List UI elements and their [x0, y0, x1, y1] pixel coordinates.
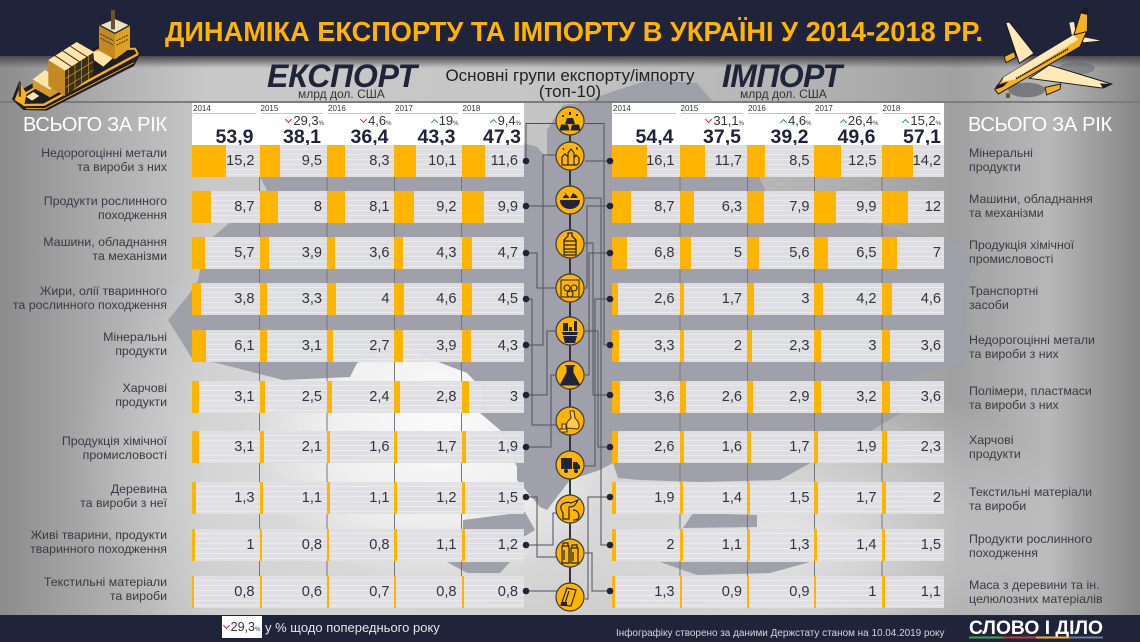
- export data rows: 1,9: [498, 439, 518, 455]
- import row labels: Полімери, пластмаси: [969, 384, 1092, 398]
- import data rows: 1,9: [654, 490, 674, 506]
- export data rows: 4,6: [436, 291, 456, 307]
- import data rows: 6,5: [856, 245, 876, 261]
- export data rows: 1,6: [369, 439, 390, 455]
- export data rows: 4,7: [498, 245, 518, 261]
- import data rows: 7,9: [789, 199, 810, 215]
- import data rows: 1,1: [921, 584, 941, 600]
- import data rows: 9,9: [856, 199, 876, 215]
- import row labels: Текстильні матеріали: [969, 485, 1092, 499]
- export data rows: 1: [246, 537, 254, 553]
- import data rows: 2,6: [654, 439, 674, 455]
- import row labels: Маса з деревини та ін.: [969, 578, 1100, 592]
- heading: center subtitle: Основні групи експорту/імпорту: [445, 66, 695, 85]
- import data rows: 2: [734, 338, 742, 354]
- export data rows: 2,8: [436, 389, 456, 405]
- export totals header: [192, 103, 524, 145]
- export totals header: 29,3%: [293, 113, 324, 128]
- import data rows: 3: [801, 291, 810, 307]
- export data rows: 2,1: [302, 439, 322, 455]
- import totals header: 49,6: [838, 126, 876, 148]
- import data rows: 3: [868, 338, 876, 354]
- import data rows: 1,7: [789, 439, 810, 455]
- export row labels: продукти: [115, 344, 167, 358]
- heading: import: ІМПОРТ: [722, 58, 842, 94]
- export row labels: промисловості: [83, 448, 167, 462]
- import data rows: 3,6: [921, 389, 941, 405]
- import data rows: 5,6: [789, 245, 810, 261]
- import data rows: 1,7: [722, 291, 742, 307]
- import totals header: 2015: [680, 104, 698, 113]
- export totals header: 19%: [439, 113, 458, 128]
- import row labels: промисловості: [969, 252, 1053, 266]
- import data rows: 12: [925, 199, 941, 215]
- export data rows: 0,8: [498, 584, 518, 600]
- export data rows: 8,3: [369, 153, 390, 169]
- export row labels: Мінеральні: [103, 330, 167, 344]
- export data rows: 4,5: [498, 291, 518, 307]
- import totals header: 54,4: [636, 126, 674, 148]
- import totals header: 2014: [613, 104, 631, 113]
- export data rows: 1,1: [369, 490, 390, 506]
- import totals header: 2017: [815, 104, 833, 113]
- legend sample: 29,3%: [231, 620, 260, 634]
- import totals header: 39,2: [771, 126, 808, 148]
- export data rows: 3,9: [302, 245, 322, 261]
- title: ДИНАМІКА ЕКСПОРТУ ТА ІМПОРТУ В УКРАЇНІ У 2014-2018 РР.: [165, 16, 983, 47]
- import data rows: 2,9: [789, 389, 810, 405]
- export data rows: 0,8: [302, 537, 322, 553]
- export totals header: 43,3: [418, 126, 456, 148]
- icon: machinery: [556, 274, 584, 302]
- import data rows: 16,1: [646, 153, 674, 169]
- import data rows: 6,3: [722, 199, 742, 215]
- import data rows: 3,2: [856, 389, 876, 405]
- export data rows: 9,9: [498, 199, 518, 215]
- export data rows: 8,7: [234, 199, 254, 215]
- import data rows: 1,4: [856, 537, 876, 553]
- export data rows: 5,7: [234, 245, 254, 261]
- export row labels: [13, 146, 167, 603]
- export totals header: 53,9: [216, 126, 254, 148]
- export data rows: 1,2: [498, 537, 518, 553]
- import data rows: 1,5: [921, 537, 941, 553]
- export row labels: та вироби: [110, 589, 167, 603]
- import data rows: 11,7: [715, 153, 742, 169]
- icon: gold bars: [556, 107, 584, 135]
- import data rows: 2,3: [789, 338, 810, 354]
- export row labels: продукти: [115, 395, 167, 409]
- data source: Інфографіку створено за даними Держстату станом на 10.04.2019 року: [616, 628, 944, 639]
- export data rows: 2,5: [302, 389, 322, 405]
- import data rows: 5: [734, 245, 742, 261]
- export data rows: 0,8: [234, 584, 254, 600]
- import data rows: 3,6: [654, 389, 674, 405]
- export totals header: 2015: [260, 104, 278, 113]
- export row labels: тваринного походження: [30, 542, 167, 556]
- icon: live animals: [556, 495, 584, 523]
- import totals header: 37,5: [703, 126, 741, 148]
- icon: minerals: [556, 142, 584, 170]
- icon: plant products bowl: [556, 186, 584, 214]
- import totals header: [612, 103, 944, 145]
- export data rows: 9,2: [436, 199, 456, 215]
- icon: plastic bottle: [556, 230, 584, 258]
- export row labels: Харчові: [123, 381, 167, 395]
- export data rows: [192, 145, 524, 608]
- total label right: ВСЬОГО ЗА РІК: [968, 114, 1112, 136]
- icon: truck: [556, 451, 584, 479]
- export data rows: 3,1: [302, 338, 322, 354]
- import data rows: 3,6: [921, 338, 941, 354]
- icon: airplane: [994, 8, 1113, 98]
- legend text: у % щодо попереднього року: [265, 620, 440, 635]
- import data rows: 2,6: [722, 389, 742, 405]
- export data rows: 1,1: [302, 490, 322, 506]
- export row labels: Продукція хімічної: [62, 434, 167, 448]
- import data rows: 1,4: [722, 490, 742, 506]
- import totals header: 2016: [748, 104, 766, 113]
- import row labels: продукти: [969, 447, 1021, 461]
- export data rows: 3,6: [369, 245, 390, 261]
- import data rows: 7: [933, 245, 941, 261]
- import data rows: 1,5: [789, 490, 810, 506]
- export row labels: та вироби з неї: [80, 496, 167, 510]
- export totals header: 47,3: [483, 126, 521, 148]
- export row labels: Жири, олії тваринного: [40, 284, 167, 298]
- export data rows: 8,1: [369, 199, 390, 215]
- import row labels: Машини, обладнання: [969, 192, 1093, 206]
- import data rows: 2,3: [921, 439, 941, 455]
- export row labels: Продукти рослинного: [44, 194, 167, 208]
- export row labels: та вироби з них: [77, 160, 167, 174]
- export data rows: 8: [314, 199, 322, 215]
- icon: textile roll: [556, 583, 584, 611]
- import totals header: 15,2%: [910, 113, 941, 128]
- import row labels: та механізми: [969, 206, 1044, 220]
- export data rows: 3,1: [234, 389, 254, 405]
- export totals header: 2017: [395, 104, 413, 113]
- import data rows: [612, 145, 944, 608]
- export data rows: 0,8: [369, 537, 390, 553]
- export row labels: Живі тварини, продукти: [31, 528, 167, 542]
- export data rows: 1,1: [436, 537, 456, 553]
- import row labels: Недорогоцінні метали: [969, 333, 1095, 347]
- export row labels: походження: [98, 208, 167, 222]
- export row labels: та механізми: [92, 249, 167, 263]
- export data rows: 3,1: [234, 439, 254, 455]
- legend sample: [222, 616, 262, 638]
- export row labels: та рослинного походження: [13, 298, 167, 312]
- import row labels: целюлозних матеріалів: [969, 592, 1103, 606]
- import totals header: 57,1: [903, 126, 941, 148]
- import data rows: 4,2: [856, 291, 876, 307]
- heading: center subtitle: (топ-10): [539, 82, 601, 101]
- export data rows: 0,6: [302, 584, 322, 600]
- total label left: ВСЬОГО ЗА РІК: [23, 114, 167, 136]
- export data rows: 11,6: [491, 153, 518, 169]
- import row labels: Продукти рослинного: [969, 532, 1092, 546]
- export totals header: 38,1: [283, 126, 321, 148]
- icon: food products: [556, 317, 584, 345]
- import row labels: Харчові: [969, 433, 1013, 447]
- export totals header: 2014: [193, 104, 211, 113]
- export unit: млрд дол. США: [298, 87, 385, 101]
- import totals header: 2018: [882, 104, 900, 113]
- export data rows: 6,1: [234, 338, 254, 354]
- import row labels: та вироби: [969, 499, 1026, 513]
- import row labels: засоби: [969, 298, 1009, 312]
- import data rows: 8,5: [789, 153, 810, 169]
- export row labels: Машини, обладнання: [43, 235, 167, 249]
- import data rows: 1,9: [856, 439, 876, 455]
- icon: cargo ship: [12, 10, 140, 111]
- import row labels: Мінеральні: [969, 146, 1033, 160]
- import data rows: 1: [868, 584, 876, 600]
- import data rows: 1,7: [856, 490, 876, 506]
- import unit: млрд дол. США: [740, 87, 827, 101]
- import data rows: 1,3: [789, 537, 810, 553]
- export data rows: 2,7: [369, 338, 390, 354]
- import data rows: 6,8: [654, 245, 674, 261]
- header bar: [0, 0, 1140, 56]
- export data rows: 1,5: [498, 490, 518, 506]
- export data rows: 1,2: [436, 490, 456, 506]
- import data rows: 1,6: [722, 439, 742, 455]
- export data rows: 1,7: [436, 439, 456, 455]
- heading: export: ЕКСПОРТ: [267, 58, 417, 94]
- import data rows: 0,9: [722, 584, 742, 600]
- import row labels: та вироби з них: [969, 398, 1059, 412]
- export data rows: 4,3: [498, 338, 518, 354]
- import totals header: 4,6%: [788, 113, 812, 128]
- import row labels: походження: [969, 546, 1038, 560]
- import row labels: Продукція хімічної: [969, 238, 1074, 252]
- import data rows: 3,3: [654, 338, 674, 354]
- import data rows: 1,1: [722, 537, 742, 553]
- export totals header: 9,4%: [498, 113, 521, 128]
- export totals header: 2016: [328, 104, 346, 113]
- export totals header: 36,4: [351, 126, 388, 148]
- import data rows: 14,2: [913, 153, 941, 169]
- export row labels: Недорогоцінні метали: [41, 146, 167, 160]
- heading: center subtitle: [445, 66, 695, 101]
- import data rows: 4,6: [921, 291, 941, 307]
- export row labels: Деревина: [111, 482, 167, 496]
- export data rows: 4,3: [436, 245, 456, 261]
- import row labels: Транспортні: [969, 284, 1038, 298]
- import totals header: 26,4%: [848, 113, 878, 128]
- logo: СЛОВО І ДІЛО: [969, 618, 1103, 639]
- export totals header: 2018: [462, 104, 480, 113]
- import data rows: 1,3: [654, 584, 674, 600]
- export data rows: 10,1: [428, 153, 456, 169]
- import data rows: 2: [666, 537, 674, 553]
- export totals header: 4,6%: [368, 113, 392, 128]
- import totals header: 31,1%: [713, 113, 744, 128]
- export data rows: 9,5: [302, 153, 322, 169]
- export data rows: 4: [381, 291, 390, 307]
- import data rows: 0,9: [789, 584, 810, 600]
- import data rows: 2,6: [654, 291, 674, 307]
- import data rows: 2: [933, 490, 941, 506]
- export row labels: Текстильні матеріали: [44, 575, 167, 589]
- export data rows: 3,8: [234, 291, 254, 307]
- icon: fats and oils: [556, 407, 584, 435]
- import row labels: та вироби з них: [969, 347, 1059, 361]
- export data rows: 0,7: [369, 584, 390, 600]
- export data rows: 3: [510, 389, 518, 405]
- import data rows: 12,5: [848, 153, 876, 169]
- export data rows: 3,3: [302, 291, 322, 307]
- icon: chemistry flask: [556, 361, 584, 389]
- export data rows: 3,9: [436, 338, 456, 354]
- footer bar: [0, 615, 1140, 642]
- export data rows: 15,2: [226, 153, 254, 169]
- export data rows: 0,8: [436, 584, 456, 600]
- icon: wood products: [556, 539, 584, 567]
- import row labels: продукти: [969, 160, 1021, 174]
- export data rows: 1,3: [234, 490, 254, 506]
- import data rows: 8,7: [654, 199, 674, 215]
- export data rows: 2,4: [369, 389, 390, 405]
